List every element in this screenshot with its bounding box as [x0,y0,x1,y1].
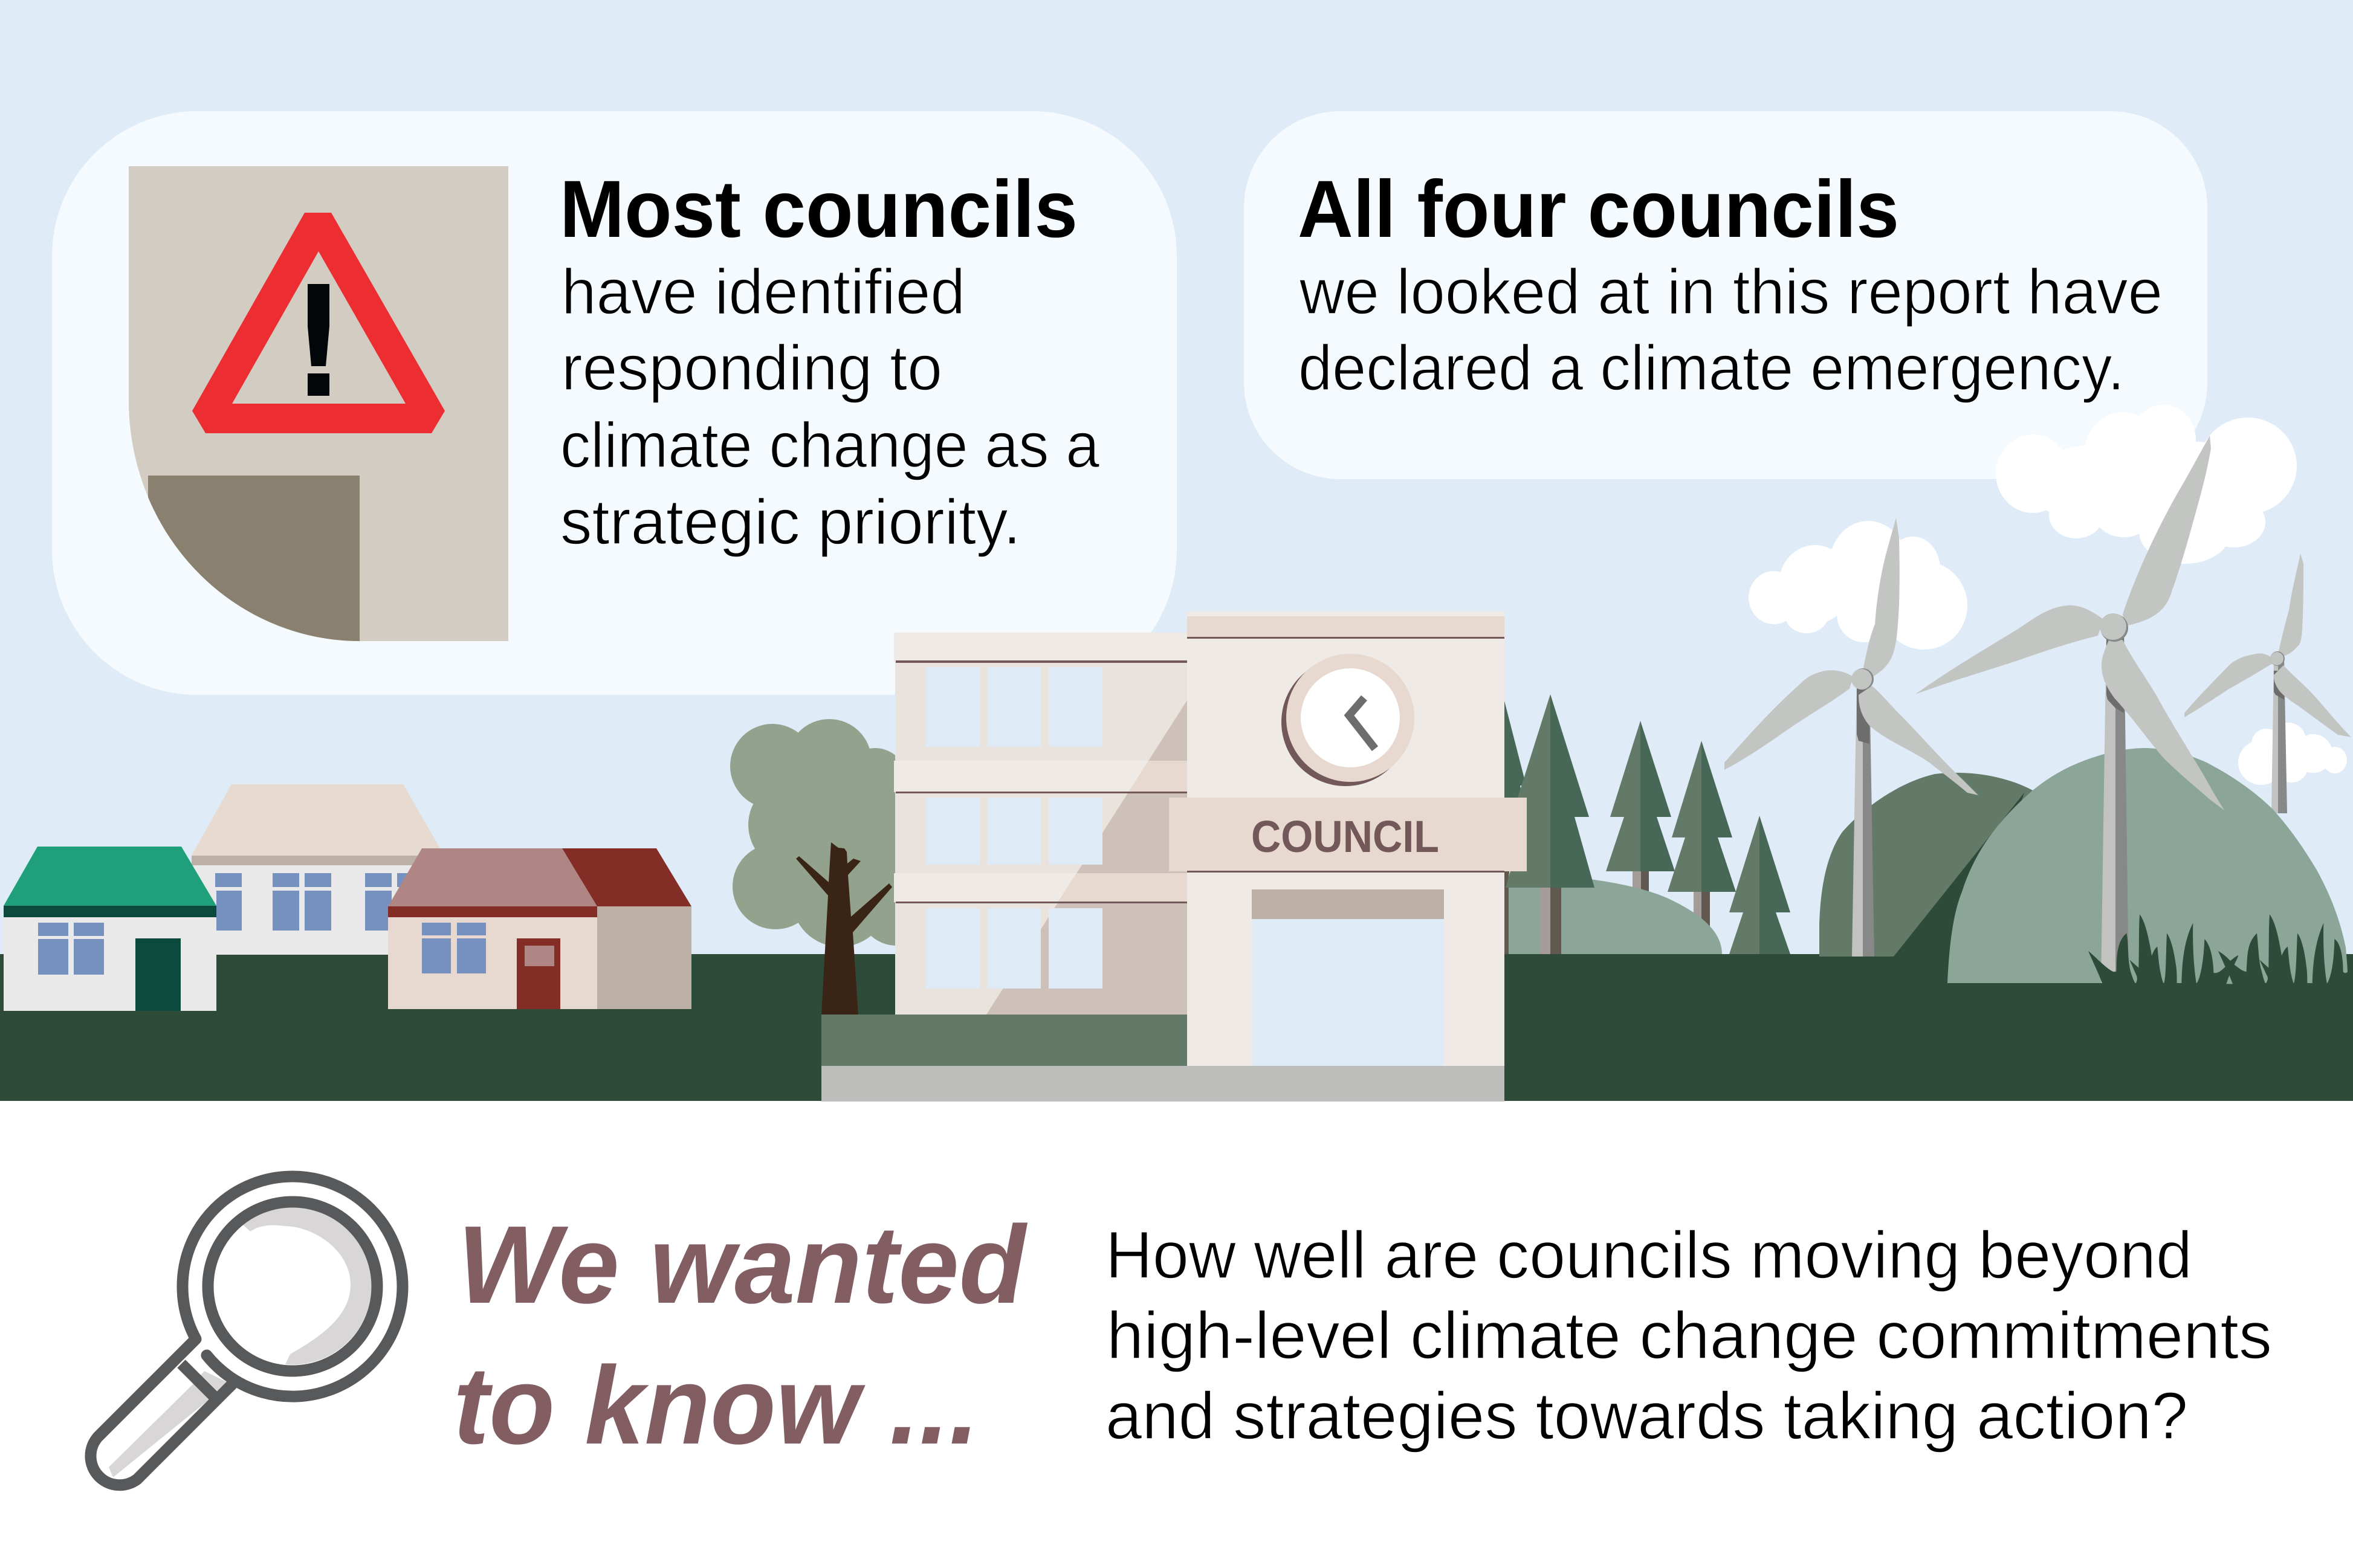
cloud: small right [2238,723,2347,785]
turbine: far right [2184,553,2351,813]
turbine: large centre right [1915,436,2224,983]
panel: all four councils [1244,111,2207,479]
text: key question: How well are councils moving beyond [1105,1218,2192,1292]
tree: pine B [1606,721,1675,931]
heading: we wanted to know: to know ... [453,1343,979,1467]
tree: pine D [1729,816,1790,954]
text: most councils body [560,256,1099,558]
building: council tower [1169,611,1527,1066]
house: green roof [4,847,216,1011]
panel: most councils [52,111,1177,695]
turbine: left [1724,518,1978,957]
text: key question: high-level climate change commitments [1107,1299,2272,1373]
grass tuft [2088,914,2353,997]
council sign [1169,798,1527,873]
hill: front [1947,748,2349,983]
heading: most councils: Most councils [560,164,1078,254]
council sign: COUNCIL [1251,811,1439,862]
text: all four councils body: declared a climate emergency. [1298,332,2125,404]
ground [0,954,2353,1101]
tree: pine A [1506,694,1594,954]
icon: magnifying glass [91,1176,403,1485]
building forecourt [821,1015,1504,1102]
back left tree crown [730,719,934,947]
heading: we wanted to know: We wanted [458,1202,1028,1326]
text: all four councils body [1298,256,2163,404]
house: red roof [388,848,691,1009]
text: most councils body: have identified [562,256,965,327]
text: all four councils body: we looked at in this report have [1299,256,2163,327]
tree: behind council tower [1504,701,1535,954]
low hill [1509,874,1722,954]
building: left wing [894,633,1187,1015]
text: most councils body: climate change as a [560,410,1099,481]
tree trunk [796,842,892,1015]
sky background [0,0,2353,1101]
icon: warning notice [129,166,508,641]
house: cream roof [192,784,444,955]
cloud: large upper right [1996,405,2297,564]
heading: all four councils: All four councils [1298,164,1899,254]
text: most councils body: responding to [562,332,942,404]
hill: dark back [1819,773,2033,957]
text: most councils body: strategic priority. [560,486,1021,558]
tree: pine C [1668,741,1736,954]
hill shadow sliver [1894,793,2024,957]
text: key question [1105,1218,2272,1453]
icon: clock [1281,654,1414,786]
text: key question: and strategies towards taking action? [1105,1379,2188,1453]
heading: we wanted to know [453,1202,1028,1467]
cloud: middle [1749,521,1967,650]
doorway [1252,889,1444,1066]
